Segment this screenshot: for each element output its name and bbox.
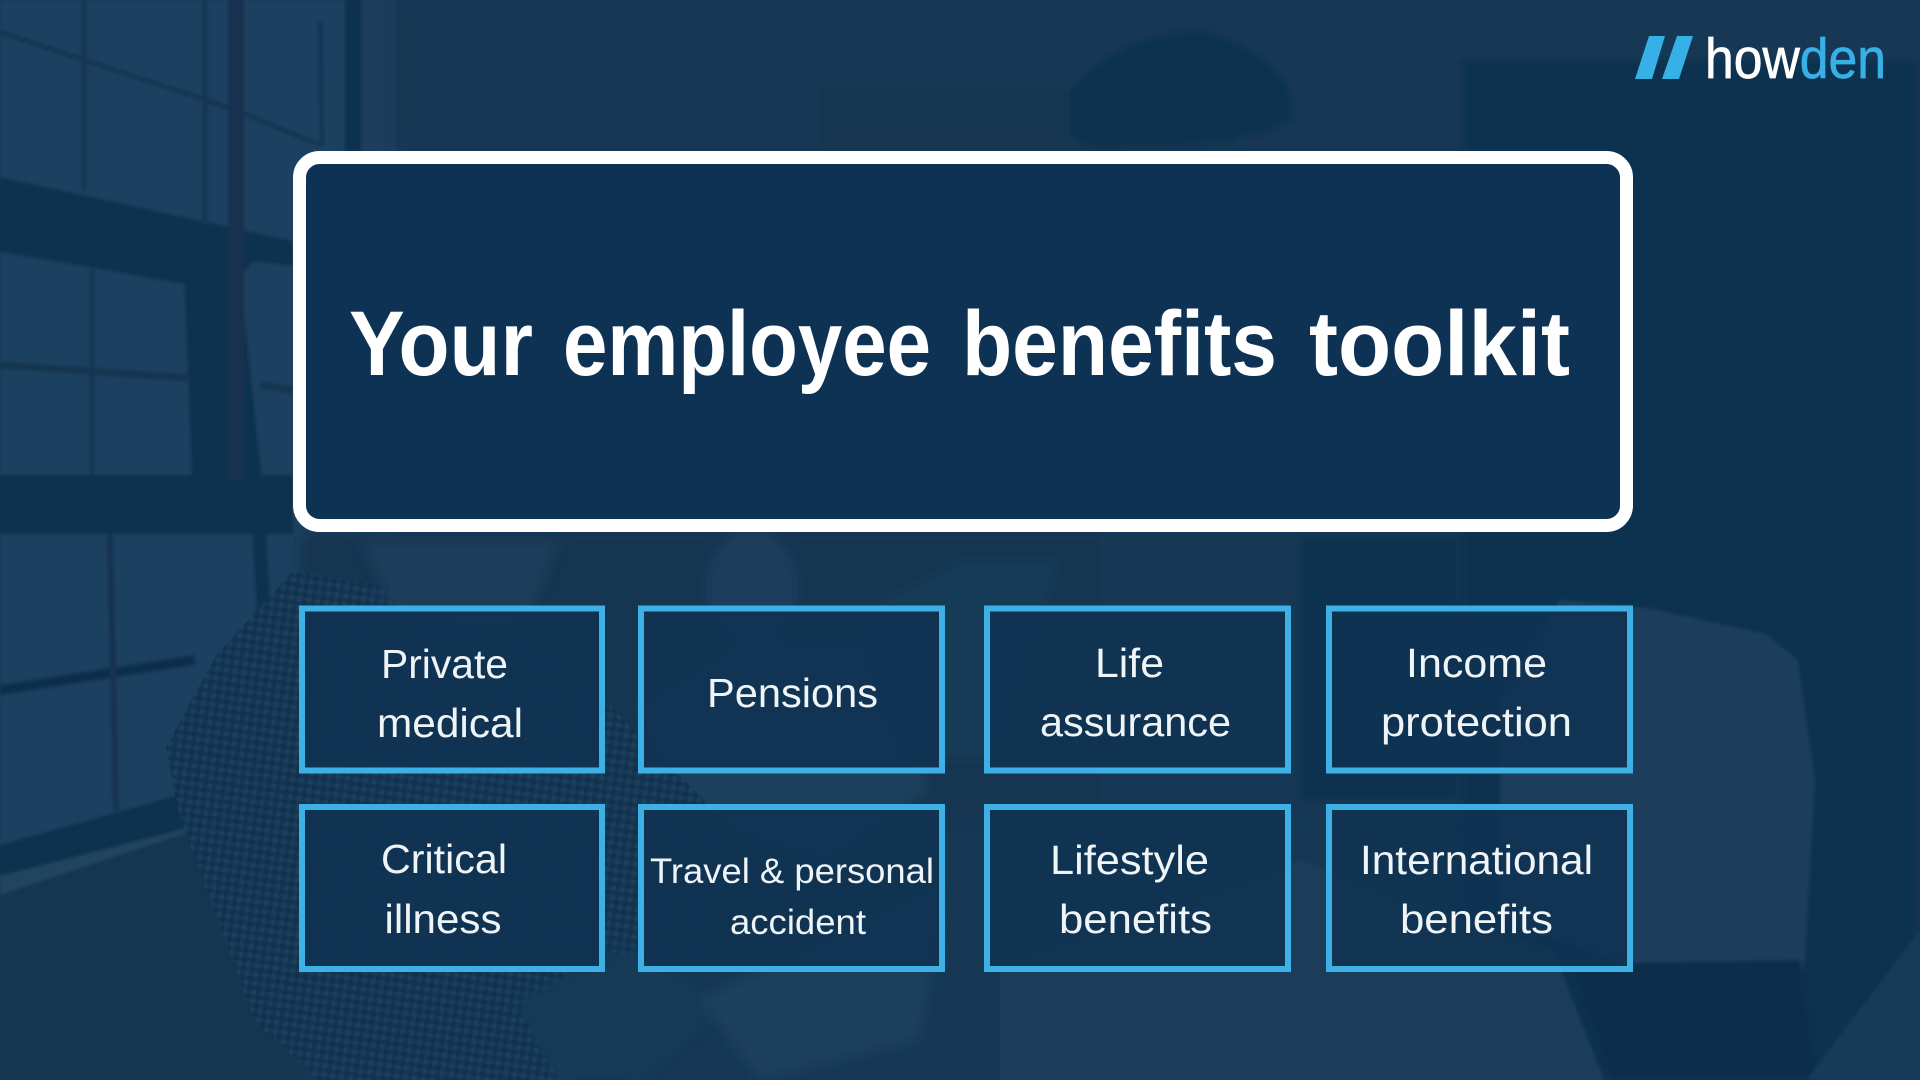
title: toolkit: [1309, 293, 1570, 395]
tile: Lifestyle benefits: [987, 807, 1288, 969]
tile: Private medical: [302, 608, 602, 770]
tile: Life assurance: assurance: [1040, 699, 1231, 745]
logo: howden: [1635, 27, 1886, 91]
tile: Life assurance: Life: [1095, 640, 1164, 686]
tile: Pensions: [641, 608, 942, 770]
title: employee: [563, 293, 931, 395]
tile: Private medical: Private: [381, 641, 508, 687]
icon: twin slashes: [1635, 36, 1693, 79]
title: [349, 293, 1570, 395]
window panes: [0, 0, 396, 1080]
tile: Income protection: [1329, 608, 1630, 770]
tile: Life assurance: [987, 608, 1288, 770]
tile: Lifestyle benefits: benefits: [1059, 896, 1212, 942]
woman in sweater on right: [1000, 532, 1920, 1080]
tile: International benefits: International: [1360, 837, 1593, 883]
tile: International benefits: benefits: [1400, 896, 1553, 942]
tile: Critical illness: [302, 807, 602, 969]
tile: Lifestyle benefits: Lifestyle: [1050, 837, 1209, 883]
tile: Private medical: medical: [377, 700, 523, 746]
title: Your: [349, 293, 533, 395]
tile: International benefits: [1329, 807, 1630, 969]
title: benefits: [962, 293, 1277, 395]
tile: Travel & personal accident: accident: [730, 903, 866, 942]
middle room between panel and tiles: [300, 530, 1460, 860]
tile: Income protection: Income: [1406, 640, 1547, 686]
tile: Pensions: Pensions: [707, 670, 878, 716]
logo wordmark: howden: [1705, 27, 1886, 91]
tile: Travel & personal accident: Travel & personal: [650, 852, 934, 891]
upper right dark room: [396, 0, 1920, 1080]
tile: Critical illness: Critical: [381, 836, 507, 882]
tile: Income protection: protection: [1381, 699, 1572, 745]
tile: Travel & personal accident: [641, 807, 942, 969]
title panel: [300, 158, 1626, 526]
man in check shirt on left: [166, 540, 945, 1080]
tile: Critical illness: illness: [384, 896, 502, 942]
